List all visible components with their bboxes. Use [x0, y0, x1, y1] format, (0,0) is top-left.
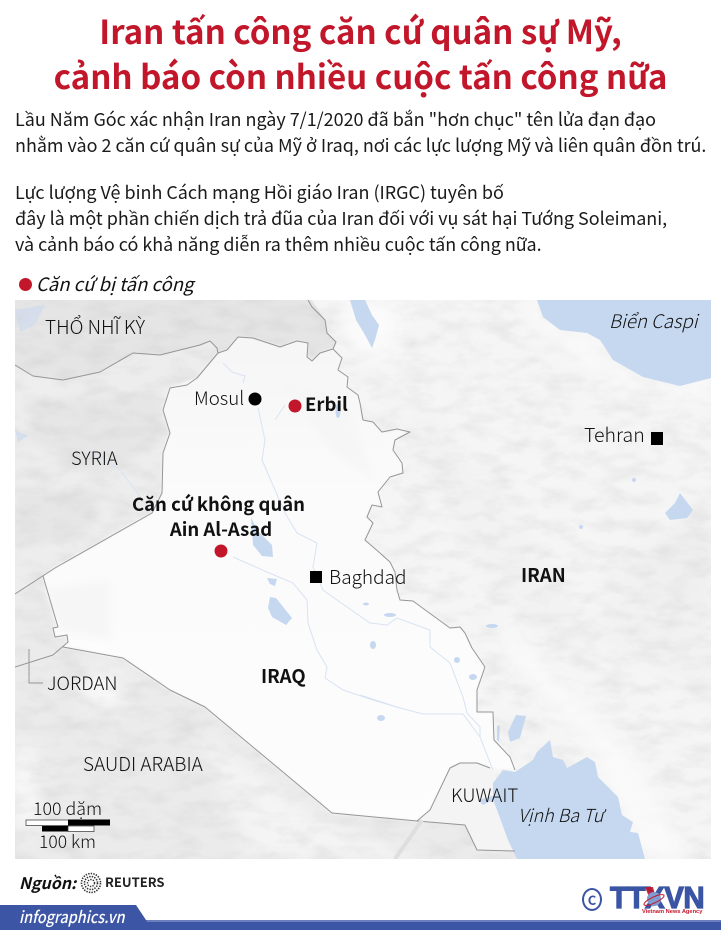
- base: Ain Al-Asad: [132, 491, 305, 558]
- intro text: nhằm vào 2 căn cứ quân sự của Mỹ ở Iraq, nơi các lực lượng Mỹ và liên quân đồn trú.: [15, 132, 706, 158]
- label: Iran: IRAN: [521, 561, 566, 588]
- Persian Gulf: [478, 740, 645, 859]
- Caspian Sea: [537, 300, 711, 386]
- logo: TTXVN: TTXVN: [610, 880, 704, 915]
- source: [19, 870, 164, 894]
- icon: globe: [643, 887, 664, 907]
- map labels: [45, 307, 700, 828]
- source: REUTERS: [105, 872, 164, 891]
- label: Turkey: THỔ NHĨ KỲ: [45, 313, 145, 340]
- title: Iran tấn công căn cứ quân sự Mỹ,: [99, 6, 622, 54]
- icon: Reuters logo: [80, 872, 102, 894]
- intro text: Lầu Năm Góc xác nhận Iran ngày 7/1/2020 đã bắn "hơn chục" tên lửa đạn đạo: [15, 106, 656, 132]
- title: cảnh báo còn nhiều cuộc tấn công nữa: [54, 51, 667, 99]
- IRGC text: Lực lượng Vệ binh Cách mạng Hồi giáo Iran (IRGC) tuyên bố: [15, 179, 504, 205]
- label: Caspian Sea: Biển Caspi: [609, 307, 700, 334]
- rivers: [90, 363, 493, 770]
- label: Saudi Arabia: SAUDI ARABIA: [83, 750, 204, 777]
- land base: [312, 300, 711, 859]
- region: Iraq: [43, 337, 515, 821]
- IRGC text: [15, 179, 667, 257]
- scale bar: 100 km: [39, 829, 96, 854]
- region: Kuwait: [433, 808, 504, 842]
- base: Ain Al-Asad: Ain Al-Asad: [169, 516, 272, 542]
- terrain texture: [15, 300, 711, 859]
- label: Syria: SYRIA: [71, 445, 118, 471]
- region: Iran shading: [400, 400, 711, 690]
- city: Baghdad: Baghdad: [329, 563, 406, 590]
- scale bar: [26, 795, 110, 854]
- coastal light bands: [353, 304, 662, 839]
- base: Erbil: Erbil: [305, 391, 348, 417]
- region: Jordan and Saudi Arabia: [15, 570, 517, 859]
- region: Turkey: [15, 300, 336, 380]
- region: Syria: [15, 341, 218, 593]
- label: Kuwait: KUWAIT: [451, 781, 518, 808]
- source: Nguồn:: [19, 870, 76, 894]
- footer bar: [0, 904, 721, 930]
- city: Mosul: Mosul: [194, 384, 244, 411]
- borders: [15, 300, 515, 859]
- logo: TTXVN: C: [588, 890, 596, 909]
- label: Persian Gulf: Vịnh Ba Tư: [518, 802, 607, 828]
- logo: TTXVN: Vietnam News Agency: [642, 909, 702, 915]
- IRGC text: và cảnh báo có khả năng diễn ra thêm nhiều cuộc tấn công nữa.: [15, 231, 542, 257]
- scale bar: 100 dặm: [33, 795, 102, 821]
- title: [54, 6, 667, 99]
- map: [15, 300, 711, 859]
- city: Tehran: Tehran: [584, 419, 645, 448]
- intro text: [15, 106, 706, 158]
- lakes: [15, 300, 693, 742]
- legend: Căn cứ bị tấn công: [36, 271, 193, 297]
- IRGC text: đây là một phần chiến dịch trả đũa của Iran đối với vụ sát hại Tướng Soleimani,: [15, 205, 667, 231]
- footer bar: infographics.vn: [19, 904, 125, 928]
- label: Jordan: JORDAN: [47, 670, 117, 696]
- base: Ain Al-Asad: Căn cứ không quân: [132, 491, 305, 517]
- label: Iraq: IRAQ: [261, 662, 306, 689]
